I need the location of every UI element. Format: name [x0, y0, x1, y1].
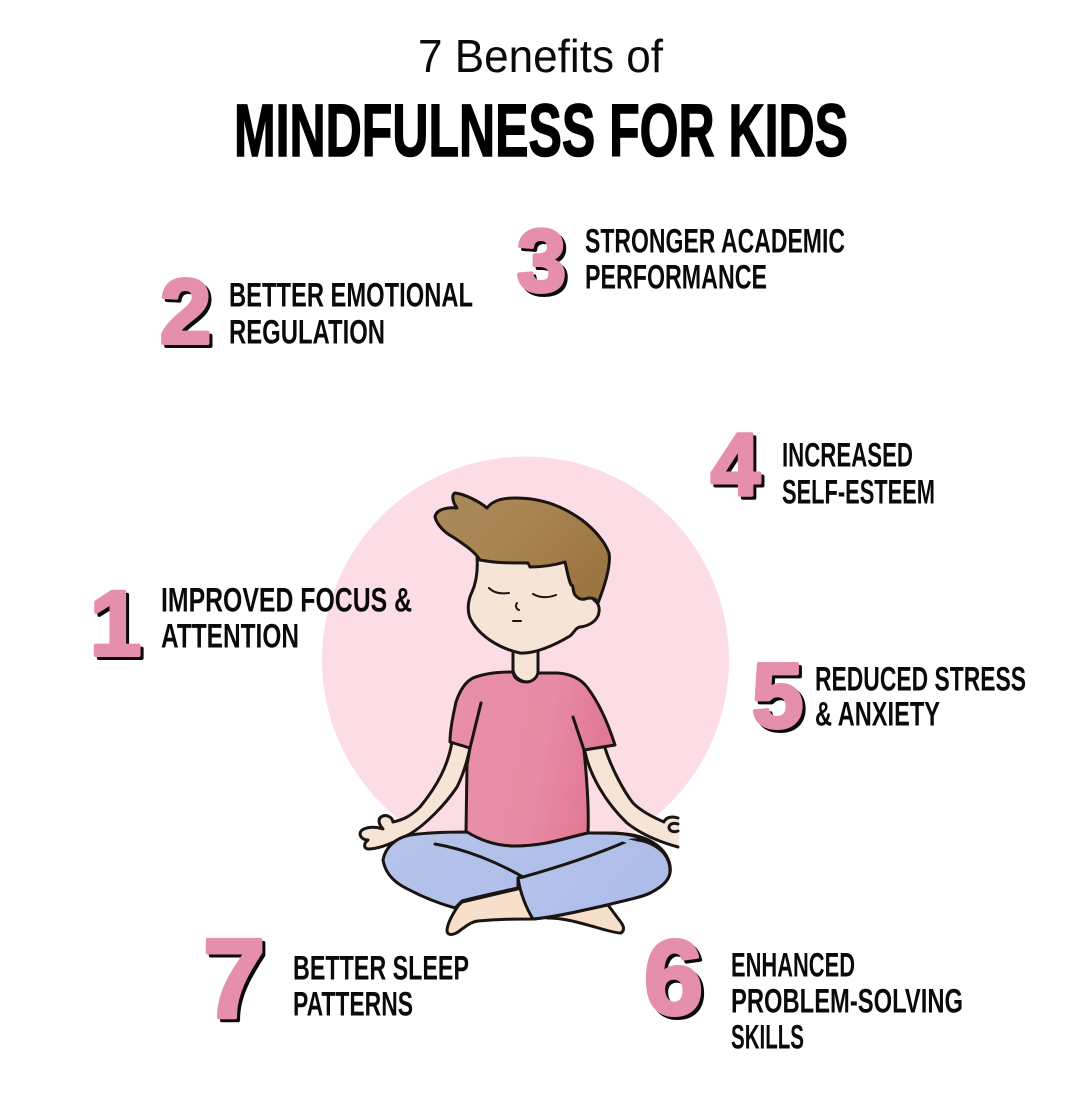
neck	[513, 650, 538, 682]
right arm	[585, 748, 679, 847]
item 7	[203, 916, 469, 1044]
hair	[435, 493, 609, 603]
label 7: BETTER SLEEP	[293, 950, 469, 988]
label 2	[229, 276, 473, 352]
number 1: 1	[90, 573, 141, 675]
shirt	[450, 672, 615, 846]
label 3: STRONGER ACADEMIC	[585, 222, 845, 260]
number 6: 6	[644, 919, 703, 1037]
item 6	[644, 919, 963, 1056]
number 6: 6	[647, 922, 706, 1040]
face	[468, 550, 599, 653]
number 4: 4	[711, 415, 760, 514]
item 5	[752, 645, 1026, 750]
label 4	[782, 436, 935, 512]
closed eyes, nose and mouth	[489, 588, 556, 621]
label 5: & ANXIETY	[815, 696, 940, 734]
item 3	[517, 211, 845, 313]
label 2: REGULATION	[229, 314, 385, 352]
number 3: 3	[517, 211, 566, 310]
sleeve fold lines	[470, 703, 584, 750]
number 1: 1	[93, 576, 144, 678]
label 1: IMPROVED FOCUS &	[161, 582, 412, 620]
label 4: SELF-ESTEEM	[782, 474, 935, 512]
number 4: 4	[714, 418, 763, 517]
number 2: 2	[160, 261, 211, 363]
item 4	[711, 415, 935, 517]
left arm	[360, 742, 470, 849]
label 6	[731, 946, 963, 1056]
right shin cuff	[518, 840, 670, 919]
label 5	[815, 660, 1026, 734]
number 5: 5	[755, 648, 806, 750]
left foot	[447, 886, 534, 934]
pants	[383, 832, 670, 919]
label 3	[585, 222, 845, 296]
label 6: SKILLS	[731, 1018, 804, 1056]
subtitle: 7 Benefits of: 7 Benefits of	[418, 30, 663, 82]
label 1: ATTENTION	[161, 618, 299, 656]
label 4: INCREASED	[782, 436, 913, 474]
label 7: PATTERNS	[293, 986, 413, 1024]
label 6: PROBLEM-SOLVING	[731, 982, 963, 1020]
number 5: 5	[752, 645, 803, 747]
number 7: 7	[206, 919, 268, 1044]
item 2	[160, 261, 473, 366]
number 2: 2	[163, 264, 214, 366]
number 7: 7	[203, 916, 265, 1041]
label 3: PERFORMANCE	[585, 258, 767, 296]
number 3: 3	[520, 214, 569, 313]
background circle	[322, 456, 729, 864]
item 1	[90, 573, 412, 678]
right foot	[547, 905, 624, 933]
label 1	[161, 582, 412, 656]
leg fold line	[435, 844, 523, 877]
illustration: meditating boy	[360, 493, 679, 934]
label 6: ENHANCED	[731, 946, 855, 984]
label 7	[293, 950, 469, 1024]
label 2: BETTER EMOTIONAL	[229, 276, 473, 314]
